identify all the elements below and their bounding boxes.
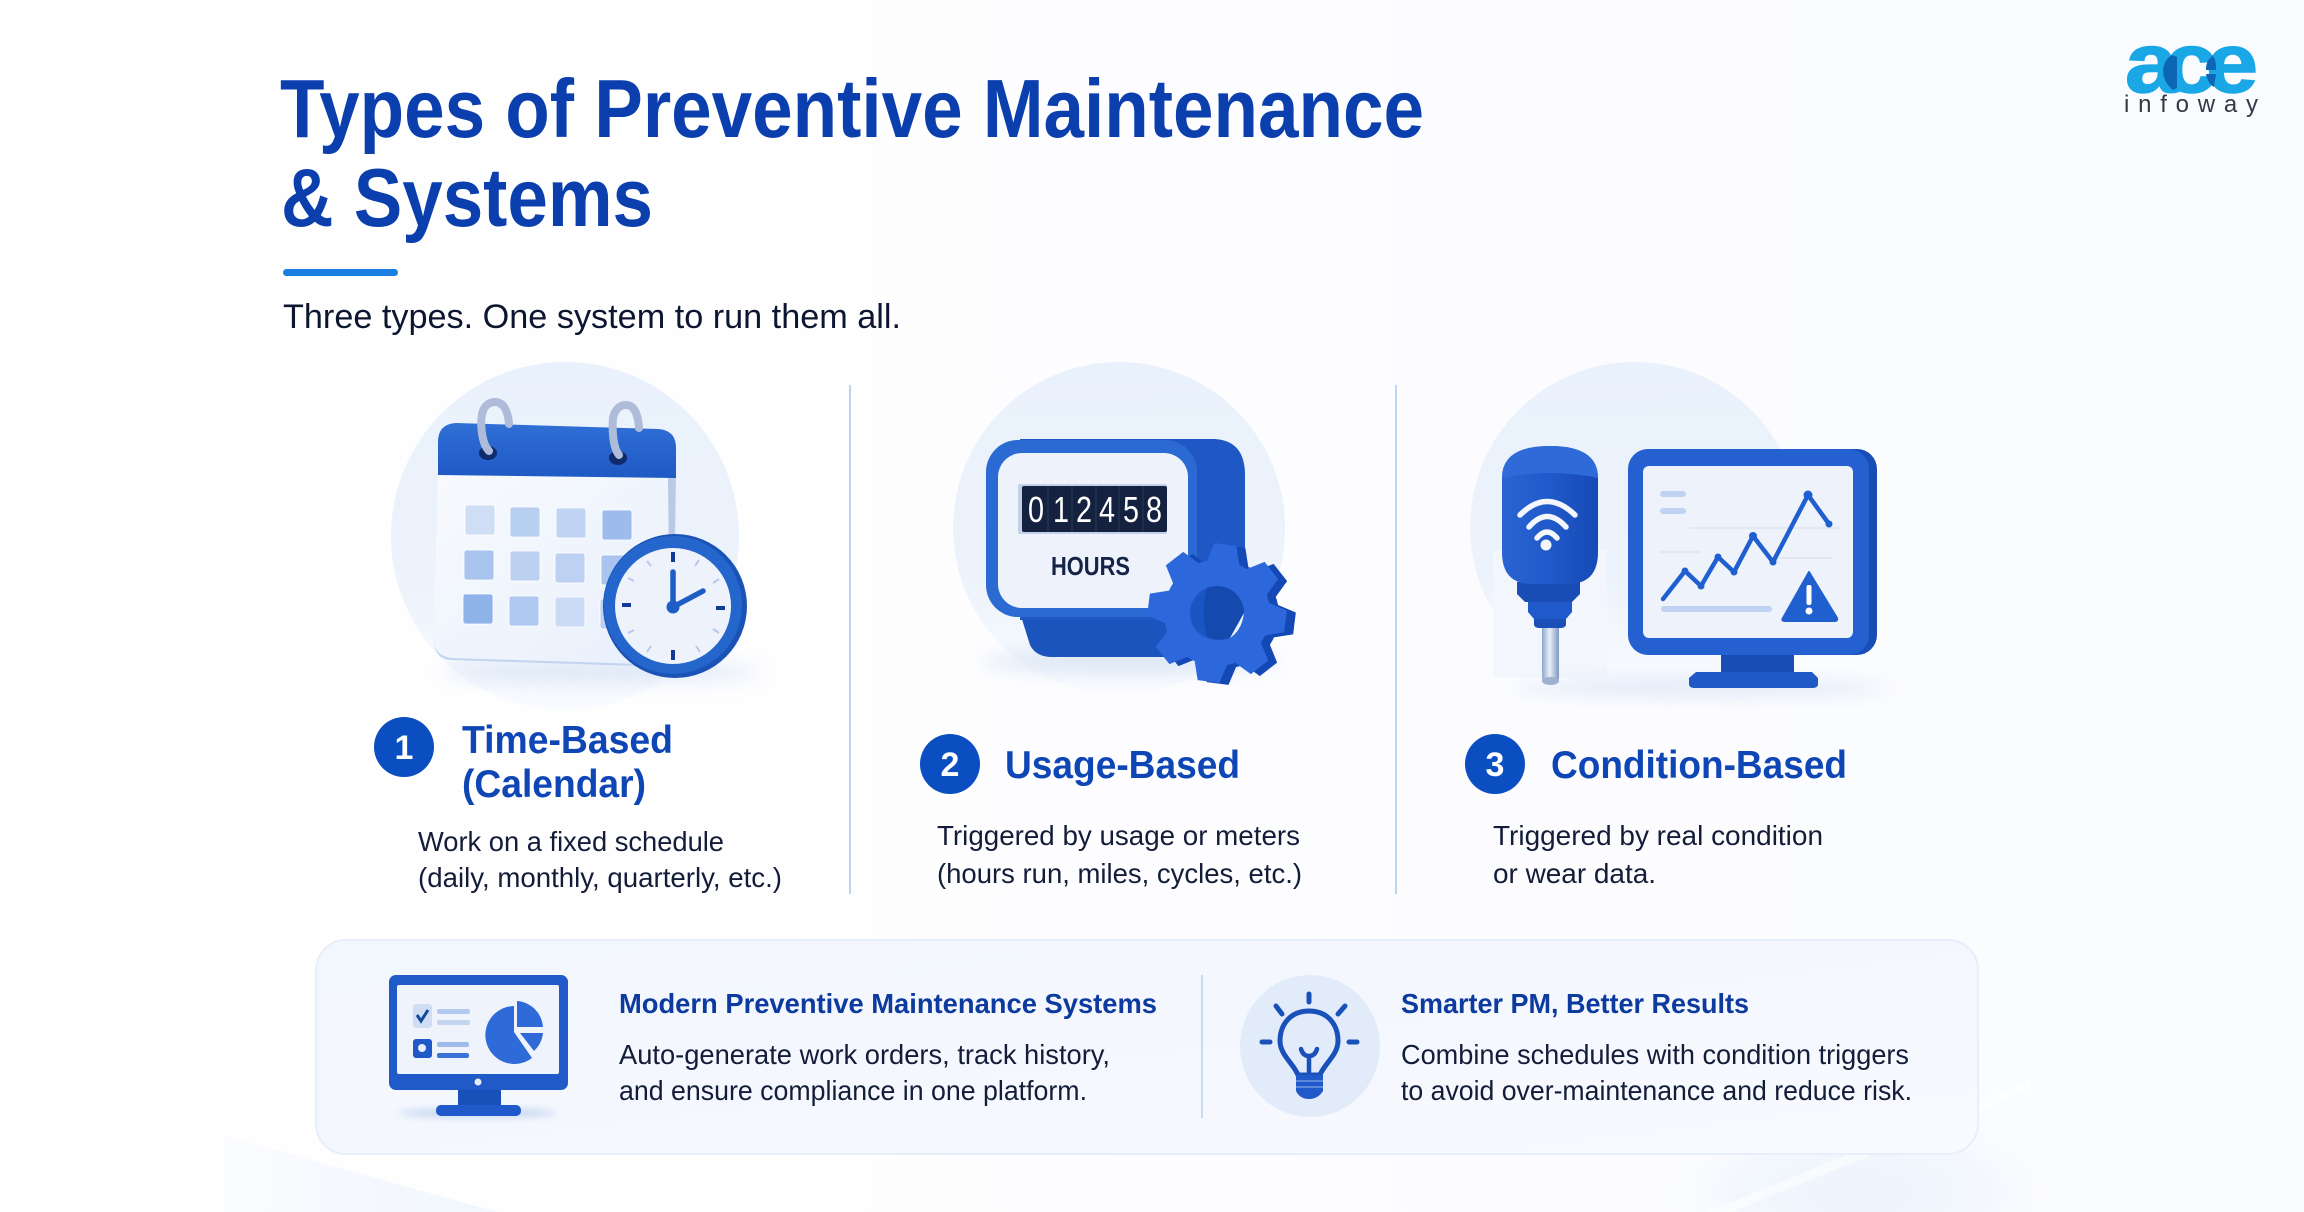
badge 2: 2: [941, 746, 959, 784]
counter display: 2: [1076, 489, 1092, 530]
badge 1: [374, 717, 434, 777]
heading: time-based: Time-Based: [462, 719, 673, 762]
counter display: 0: [1028, 489, 1044, 530]
description: usage-based: [937, 820, 1302, 889]
badge 3: 3: [1486, 746, 1504, 784]
panel: usage-based: [920, 362, 1302, 889]
icon: pie chart: [485, 1001, 543, 1064]
icon: calendar with clock: [391, 362, 760, 710]
counter display: 5: [1123, 489, 1139, 530]
description: condition-based: Triggered by real condition: [1493, 820, 1823, 851]
counter display: 1: [1053, 489, 1069, 530]
logo: ace infoway: a: [2125, 16, 2179, 110]
description: condition-based: [1493, 820, 1823, 889]
title: [280, 62, 1424, 244]
description: modern systems: and ensure compliance in one platform.: [619, 1075, 1087, 1106]
logo: ace infoway: e: [2206, 16, 2258, 110]
icon: monitor with trend chart: [1628, 449, 1877, 688]
description: usage-based: (hours run, miles, cycles, etc.): [937, 858, 1302, 889]
heading: modern systems: Modern Preventive Maintenance Systems: [619, 988, 1157, 1019]
description: time-based: [418, 826, 782, 893]
description: usage-based: Triggered by usage or meters: [937, 820, 1300, 851]
icon: lightbulb: [1240, 975, 1380, 1117]
logo: ace infoway: c: [2164, 16, 2217, 110]
panel: time-based: [374, 362, 782, 893]
counter display: 4: [1099, 489, 1115, 530]
description: smarter PM: Combine schedules with condition triggers: [1401, 1039, 1909, 1070]
heading: condition-based: Condition-Based: [1551, 744, 1847, 787]
heading: time-based: [462, 719, 673, 806]
description: modern systems: [619, 1039, 1110, 1106]
panel: condition-based: [1465, 362, 1890, 889]
bottom panel: [316, 940, 1978, 1154]
icon: gear: [1146, 542, 1297, 686]
badge 2: [920, 734, 980, 794]
column dividers: [850, 385, 1396, 894]
description: time-based: Work on a fixed schedule: [418, 826, 724, 857]
logo: ace infoway: [2124, 16, 2258, 118]
description: smarter PM: to avoid over-maintenance and reduce risk.: [1401, 1075, 1912, 1106]
icon: hour meter with gear: [953, 362, 1297, 694]
title: & Systems: [281, 151, 653, 244]
counter display: 8: [1146, 489, 1162, 530]
heading: smarter PM: Smarter PM, Better Results: [1401, 988, 1749, 1019]
badge 3: [1465, 734, 1525, 794]
description: modern systems: Auto-generate work orders, track history,: [619, 1039, 1110, 1070]
title: Types of Preventive Maintenance: [280, 62, 1424, 155]
description: smarter PM: [1401, 1039, 1912, 1106]
heading: time-based: (Calendar): [462, 763, 646, 806]
icon: sensor and monitor: [1470, 362, 1890, 695]
icon: dashboard monitor: [389, 975, 568, 1117]
description: condition-based: or wear data.: [1493, 858, 1656, 889]
badge 1: 1: [395, 729, 413, 767]
icon: wireless sensor: [1502, 446, 1598, 685]
logo: ace infoway: infoway: [2124, 91, 2258, 118]
heading: usage-based: Usage-Based: [1005, 744, 1240, 787]
title underline: [283, 269, 398, 276]
icon: clock: [603, 534, 747, 678]
icon: warning triangle: [1782, 572, 1837, 621]
description: time-based: (daily, monthly, quarterly, etc.): [418, 862, 782, 893]
subtitle: Three types. One system to run them all.: [283, 298, 901, 336]
counter display: [1018, 484, 1167, 534]
meter label: HOURS: [1051, 551, 1130, 581]
